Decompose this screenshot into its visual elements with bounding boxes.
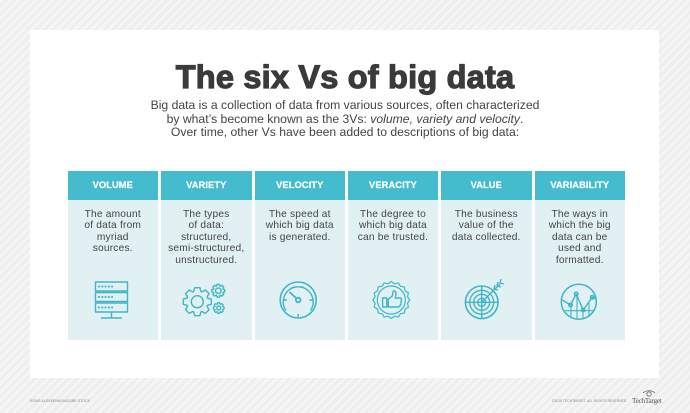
text: variety: structured, (181, 232, 231, 242)
heading: value (441, 171, 532, 200)
panel: veracity (348, 171, 438, 340)
text: veracity (358, 208, 428, 242)
text: variability: which the big (549, 220, 611, 231)
panel: volume (68, 171, 158, 340)
text: value: The business (455, 208, 518, 220)
text: volume: sources. (93, 243, 133, 254)
text: value: data collected. (452, 232, 521, 242)
text: value (452, 208, 521, 242)
heading: volume: VOLUME (93, 180, 133, 190)
heading: velocity (254, 171, 345, 200)
text: velocity (266, 208, 334, 242)
image credit: KONG ALEXEENKO/ADOBE STOCK (30, 399, 90, 403)
heading: variability: VARIABILITY (550, 180, 609, 190)
heading: volume (68, 171, 158, 200)
icon: target with arrow (464, 278, 504, 320)
text: value: value of the (459, 220, 514, 231)
text: variety: semi-structured, (168, 243, 244, 254)
text: variability: The ways in (551, 208, 608, 220)
icon: server rack (94, 281, 128, 319)
text: volume: myriad (97, 232, 129, 242)
copyright: ©2018 TECHTARGET. ALL RIGHTS RESERVED (552, 399, 626, 403)
text: veracity: The degree to (360, 208, 426, 220)
text: volume: of data from (84, 220, 141, 231)
heading: variety (161, 171, 252, 200)
panel: value (441, 171, 532, 340)
intro text (151, 98, 539, 139)
text: veracity: which big data (359, 220, 427, 231)
logo: TechTarget: TechTarget (632, 397, 661, 405)
intro text: Over time, other Vs have been added to descriptions of big data: (171, 125, 519, 139)
intro text: by what’s become known as the 3Vs: volume, variety and velocity. (167, 112, 523, 126)
text: variety: of data: (188, 220, 224, 231)
icon: speedometer (279, 281, 317, 319)
heading: veracity (348, 171, 438, 200)
text: velocity: The speed at (269, 208, 331, 220)
text: variety: The types (183, 208, 230, 220)
title: The six Vs of big data (176, 59, 514, 95)
panel: velocity (254, 171, 345, 340)
panel: variety (161, 171, 252, 340)
text: variability: used and (558, 243, 602, 254)
text: velocity: is generated. (269, 232, 330, 242)
text: variability (548, 208, 611, 266)
heading: veracity: VERACITY (369, 180, 417, 190)
white panel (30, 30, 659, 378)
icon: thumbs-up badge (372, 280, 410, 320)
text: veracity: can be trusted. (358, 232, 428, 242)
text: velocity: which big data (266, 220, 334, 231)
text: volume: The amount (85, 208, 141, 220)
text: volume (84, 208, 141, 254)
text: variability: data can be (552, 232, 607, 242)
text: variety: unstructured. (175, 254, 237, 266)
icon: gears (182, 284, 226, 316)
icon: chart in circle (560, 284, 598, 320)
heading: value: VALUE (471, 180, 502, 190)
text: variability: formatted. (556, 254, 604, 266)
intro text: Big data is a collection of data from various sources, often characterized (151, 98, 539, 112)
panel: variability (534, 171, 625, 340)
text: variety (168, 208, 244, 266)
heading: variability (534, 171, 625, 200)
heading: velocity: VELOCITY (276, 180, 323, 190)
heading: variety: VARIETY (186, 180, 226, 190)
logo: TechTarget (632, 390, 662, 405)
